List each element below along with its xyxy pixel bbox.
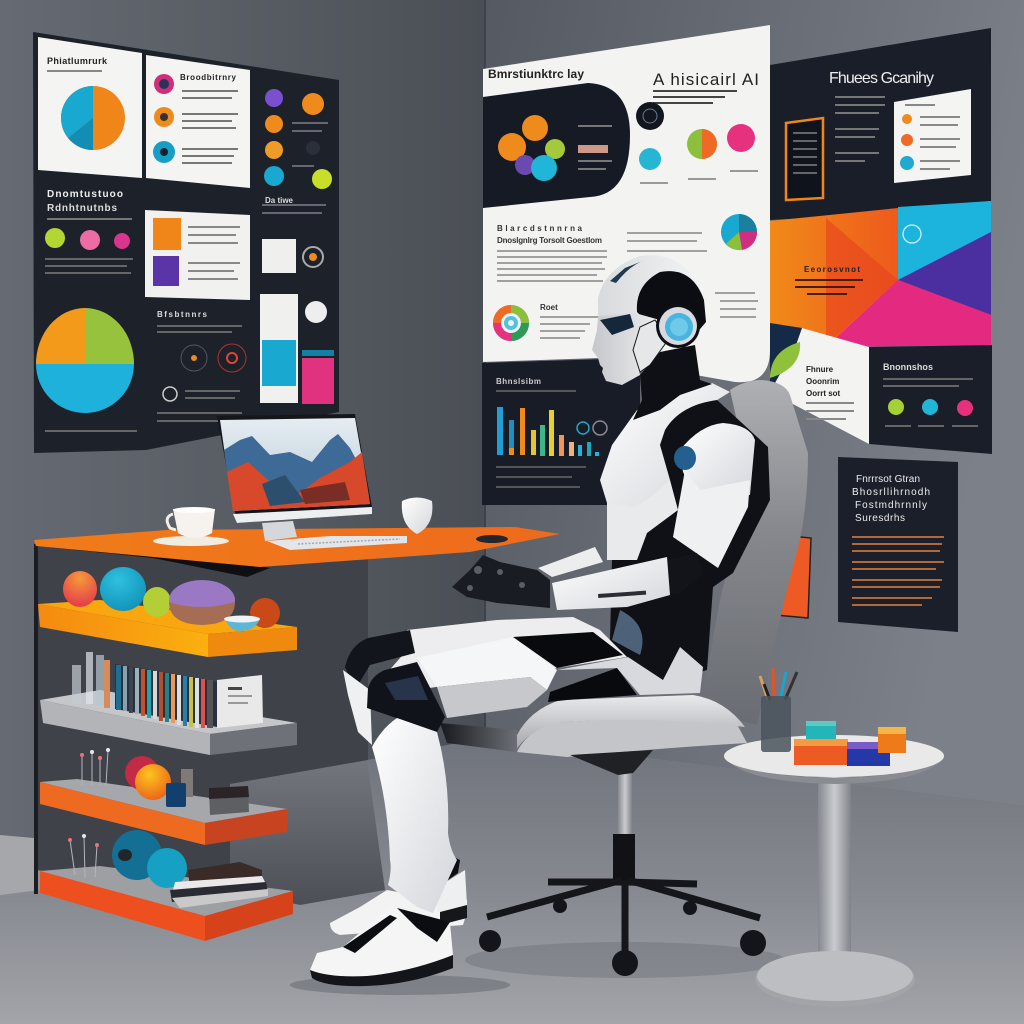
shelf 3: orange with spheres bbox=[40, 748, 287, 845]
chair back bbox=[700, 380, 808, 725]
panel: geometric colour banner: Eeorosvnot bbox=[804, 265, 860, 274]
panel: dark icon card bbox=[869, 345, 992, 454]
robot hand bbox=[452, 555, 550, 608]
chair column bbox=[618, 770, 632, 836]
panel: dark icon card: Bnonnshos bbox=[883, 362, 933, 372]
panel: legend poster: Broodbitrnry bbox=[180, 73, 237, 82]
heading: left dark panel: Rdnhtnutnbs bbox=[47, 203, 117, 214]
helmet shell bbox=[598, 255, 706, 322]
desk and shelves bbox=[34, 527, 560, 941]
table base bbox=[755, 951, 915, 1007]
chart: small pie bbox=[721, 214, 757, 250]
shelf 4: orange with balls and books bbox=[40, 830, 293, 941]
coffee cup bbox=[153, 507, 229, 546]
heading: left dark panel bbox=[47, 189, 132, 220]
text block: main poster body: Blarcdstnnrna bbox=[497, 224, 583, 233]
poster group: back wall bbox=[482, 25, 992, 632]
robot shoulder and upper arm bbox=[673, 423, 755, 568]
robot chest and abdomen bbox=[600, 383, 730, 560]
heading: main poster subtitle: A hisicairl AI bbox=[653, 70, 759, 89]
chart: colour ring bbox=[498, 115, 565, 181]
panel: white feature card bbox=[770, 323, 869, 444]
robot thigh front bbox=[367, 632, 703, 732]
desk top bbox=[34, 527, 560, 577]
books and jars bbox=[72, 652, 263, 728]
panel: bar chart dark panel: Bhnslsibm bbox=[496, 377, 541, 386]
icon: dark dial bbox=[636, 102, 664, 130]
robot head bbox=[592, 255, 706, 385]
robot forearm and hand bbox=[452, 547, 703, 610]
chart: bars bbox=[497, 407, 607, 456]
panel: dark text poster: Suresdrhs bbox=[855, 513, 905, 524]
keyboard bbox=[267, 536, 407, 550]
monitor screen: mountains bbox=[220, 418, 370, 511]
shelf 1: orange bbox=[38, 600, 297, 657]
helmet black cap bbox=[637, 271, 706, 348]
panel: bar chart dark panel bbox=[482, 358, 640, 505]
panel: dark text poster: Fostmdhrnnly bbox=[855, 500, 927, 511]
shelf unit dark frame bbox=[34, 544, 368, 895]
text block and radial icons: Bfsbtnnrs bbox=[157, 310, 208, 319]
pencil cup bbox=[760, 668, 797, 752]
panel: orange sliver poster bbox=[775, 535, 811, 618]
robot bbox=[310, 255, 770, 986]
panel: coloured dots column: Da tiwe bbox=[265, 196, 294, 205]
panel: main white poster bbox=[483, 25, 770, 382]
shelf 2: grey with books bbox=[40, 652, 297, 755]
panel: dark text poster bbox=[838, 457, 958, 632]
panel: pie chart poster bbox=[38, 37, 142, 178]
spheres on shelf 1 bbox=[63, 567, 280, 631]
text block and radial icons bbox=[157, 310, 246, 422]
text block: lower poster body bbox=[540, 303, 598, 339]
panel: white feature card: Ooonrim bbox=[806, 377, 839, 386]
icon: headphone bbox=[656, 304, 700, 348]
icon row: circle chart set bbox=[639, 124, 758, 184]
cheek plate bbox=[633, 320, 668, 372]
panel: coloured dots column bbox=[262, 89, 332, 214]
panel: small cards column bbox=[260, 239, 334, 404]
robot shin and shoe bbox=[310, 718, 457, 986]
poster group: left wall bbox=[33, 32, 339, 453]
text block: lower poster body: Roet bbox=[540, 303, 558, 312]
small dark object bbox=[476, 535, 508, 543]
robot torso dark back bbox=[610, 400, 770, 690]
heading: top right title: Fhuees Gcanihy bbox=[829, 70, 934, 87]
text block: main poster body: Dnoslgnlrg Torsolt Goestlom bbox=[497, 236, 602, 245]
panel: dark text poster: Bhosrllihrnodh bbox=[852, 487, 930, 498]
panel: legend poster bbox=[146, 55, 250, 188]
panel: dark top right poster bbox=[770, 28, 991, 220]
panel: left wall dark backing bbox=[33, 32, 339, 453]
table top bbox=[724, 756, 944, 784]
panel: geometric colour banner bbox=[770, 201, 991, 347]
panel: white checklist card bbox=[894, 89, 971, 183]
heading: left dark panel: Dnomtustuoo bbox=[47, 189, 123, 200]
face bbox=[592, 313, 660, 385]
panel: white feature card: Oorrt sot bbox=[806, 389, 841, 398]
icon row: lime pink magenta dots bbox=[45, 228, 133, 274]
panel: dark rounded hero bbox=[483, 83, 630, 208]
stacked books bbox=[170, 862, 268, 908]
chair base bbox=[487, 880, 760, 955]
robot lower torso bbox=[612, 590, 700, 680]
side table bbox=[724, 668, 944, 1007]
heading: main poster title: Bmrstiunktrc lay bbox=[488, 67, 584, 81]
stacked blocks bbox=[794, 721, 906, 766]
robot neck bbox=[633, 345, 712, 420]
panel: orange white card bbox=[145, 210, 250, 300]
panel: pie chart poster: Phiatlumrurk bbox=[47, 56, 108, 66]
robot back leg bbox=[330, 617, 627, 935]
visor bbox=[600, 314, 634, 335]
office chair bbox=[440, 380, 808, 976]
white vase cup bbox=[402, 498, 432, 534]
text block: main poster body bbox=[497, 224, 758, 318]
monitor and tabletop objects bbox=[153, 414, 508, 550]
monitor bbox=[217, 414, 372, 541]
chart: donut ring bbox=[497, 309, 525, 337]
chair seat bbox=[517, 717, 747, 757]
table stem bbox=[818, 770, 851, 978]
panel: orange outlined card bbox=[786, 118, 823, 200]
chair seat underside bbox=[440, 723, 517, 752]
panel: dark text poster: Fnrrrsot Gtran bbox=[856, 474, 920, 485]
chart: large pie bbox=[36, 308, 137, 432]
panel: white feature card: Fhnure bbox=[806, 365, 834, 374]
